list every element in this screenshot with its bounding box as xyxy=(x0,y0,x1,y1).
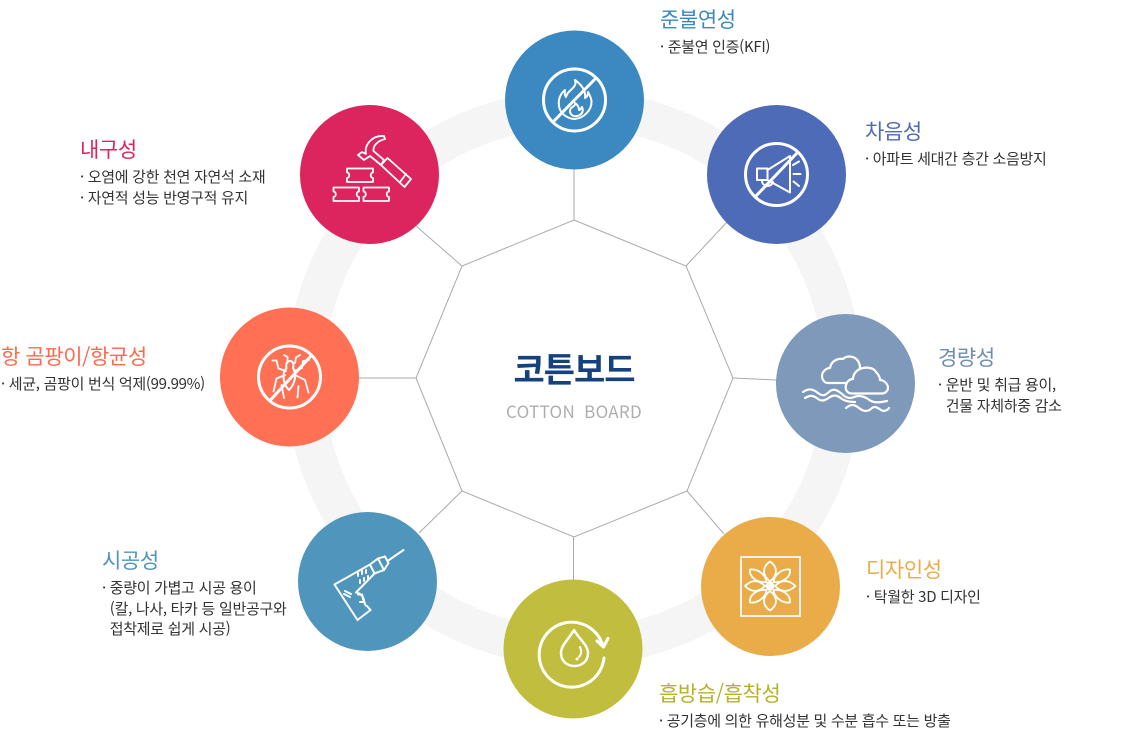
center title: 코튼보드 xyxy=(513,343,635,392)
circle: durability xyxy=(300,105,439,244)
icon: no bug xyxy=(258,346,320,408)
text: anti-mold: 항 곰팡이/항균성 xyxy=(1,341,147,371)
text: sound insulation: · 아파트 세대간 층간 소음방지 xyxy=(865,148,1046,169)
text: anti-mold xyxy=(1,341,205,394)
circle: design xyxy=(701,517,840,656)
text: workability: 접착제로 쉽게 시공) xyxy=(110,618,230,639)
background ring xyxy=(305,109,843,647)
text: lightweight: · 운반 및 취급 용이, xyxy=(938,374,1056,395)
text: sound insulation xyxy=(865,116,1046,169)
circle: moisture control xyxy=(504,580,642,718)
text: lightweight: 경량성 xyxy=(938,342,995,372)
text: durability: · 오염에 강한 천연 자연석 소재 xyxy=(80,166,265,187)
text: workability xyxy=(102,545,286,639)
circle: workability xyxy=(298,512,437,651)
text: design: 디자인성 xyxy=(866,554,942,584)
circle: lightweight xyxy=(776,314,915,453)
text: moisture control xyxy=(659,678,951,731)
center subtitle: COTTON BOARD xyxy=(506,398,642,423)
text: durability: · 자연적 성능 반영구적 유지 xyxy=(80,186,248,208)
text: flame resistance: 준불연성 xyxy=(660,4,736,34)
central octagon with spokes xyxy=(358,169,777,580)
circle: anti-mold xyxy=(220,308,359,446)
text: workability: · 중량이 가볍고 시공 용이 xyxy=(102,577,256,598)
text: lightweight: 건물 자체하중 감소 xyxy=(946,394,1062,416)
text: anti-mold: · 세균, 곰팡이 번식 억제(99.99%) xyxy=(1,373,205,394)
text: durability xyxy=(80,134,265,208)
icon: water drop cycle xyxy=(539,622,608,687)
text: lightweight xyxy=(938,342,1062,416)
circle: flame resistance xyxy=(505,30,644,170)
icon: drill xyxy=(334,550,404,620)
text: moisture control: 흡방습/흡착성 xyxy=(659,678,780,708)
text: flame resistance xyxy=(660,4,770,57)
text: durability: 내구성 xyxy=(80,134,137,164)
text: flame resistance: · 준불연 인증(KFI) xyxy=(660,36,770,57)
icon: hammer and bricks xyxy=(334,136,411,201)
icon: clouds and wind xyxy=(803,357,889,411)
icon: no megaphone xyxy=(746,144,808,206)
text: sound insulation: 차음성 xyxy=(865,116,922,146)
text: design xyxy=(866,554,981,607)
text: design: · 탁월한 3D 디자인 xyxy=(866,586,981,607)
text: moisture control: · 공기층에 의한 유해성분 및 수분 흡수 또는 방출 xyxy=(659,710,951,731)
circle: sound insulation xyxy=(707,105,846,244)
icon: flower tile xyxy=(741,557,800,616)
text: workability: 시공성 xyxy=(102,545,159,575)
icon: no fire xyxy=(544,69,606,131)
text: workability: (칼, 나사, 타카 등 일반공구와 xyxy=(110,598,286,618)
